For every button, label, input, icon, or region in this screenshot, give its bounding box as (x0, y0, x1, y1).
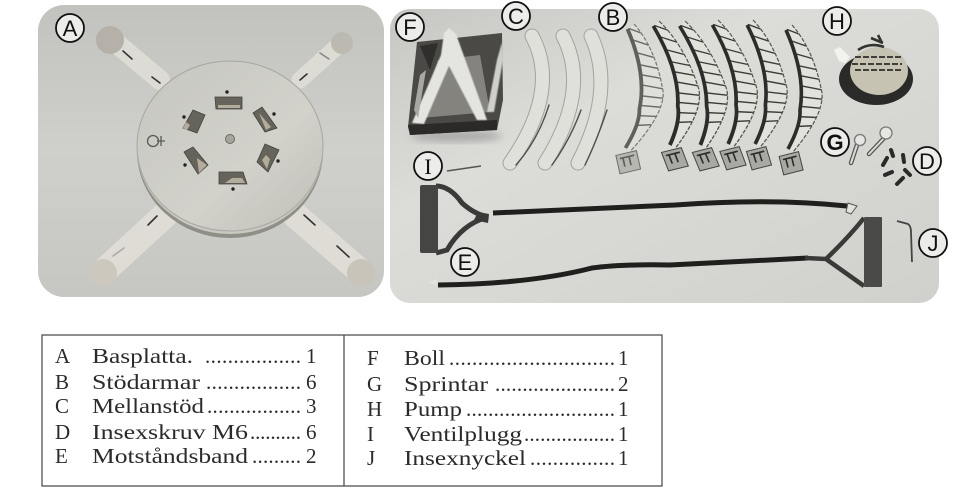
label C: C (508, 4, 524, 29)
row A: ................. (205, 344, 301, 368)
label I (414, 152, 442, 180)
row H: Pump (404, 397, 462, 421)
support arm 5 (740, 20, 797, 170)
row E: E (55, 444, 68, 468)
row H: 1 (618, 397, 628, 421)
row I: I (367, 422, 374, 446)
row E: Motståndsband (92, 444, 249, 468)
part H: pump (834, 35, 913, 105)
row C: 3 (306, 394, 316, 418)
panel A: base plate photo (38, 5, 384, 297)
row C: ................. (207, 394, 301, 418)
row B (55, 370, 316, 394)
label J (919, 229, 947, 257)
row F: Boll (404, 346, 445, 370)
row A: Basplatta. (92, 344, 193, 368)
row D (55, 420, 316, 444)
label F (396, 13, 424, 41)
row J (367, 446, 628, 470)
label D: D (919, 149, 935, 174)
row J: J (367, 446, 375, 470)
row I: 1 (618, 422, 628, 446)
row G (367, 372, 628, 396)
label J: J (928, 231, 938, 256)
row B: 6 (306, 370, 316, 394)
disc slots (183, 97, 279, 184)
row C: Mellanstöd (92, 394, 205, 418)
support arm 2 (645, 21, 715, 171)
label H: H (829, 9, 845, 34)
row J: 1 (618, 446, 628, 470)
label E: E (458, 250, 472, 275)
support arm 3 (672, 21, 746, 171)
row I: ................. (524, 422, 615, 446)
support arm 1 (615, 24, 672, 174)
row E (55, 444, 316, 468)
base plate disc (137, 61, 323, 238)
label G: G (826, 130, 844, 155)
part D: hex screws (883, 150, 910, 184)
row E: ......... (252, 444, 301, 468)
part G: pins (851, 127, 892, 163)
support arm 4 (705, 20, 772, 170)
row G: 2 (618, 372, 628, 396)
label B (599, 3, 627, 31)
row D: .......... (250, 420, 301, 444)
label C (502, 2, 530, 30)
row F: F (367, 346, 379, 370)
part E: resistance band 1 (420, 185, 857, 253)
row C (55, 394, 316, 418)
row J: Insexnyckel (404, 446, 526, 470)
row F: 1 (618, 346, 628, 370)
base plate arms (89, 26, 375, 287)
part I: valve plug (447, 166, 481, 171)
row J: ............... (530, 446, 615, 470)
row G: G (367, 372, 382, 396)
row D: D (55, 420, 70, 444)
row A: 1 (306, 344, 316, 368)
label G (821, 128, 849, 156)
part E: resistance band 2 (428, 217, 882, 287)
row B: ................. (206, 370, 301, 394)
part C: intermediate supports (510, 36, 607, 165)
part B: support arms (615, 20, 828, 175)
row A (55, 344, 316, 368)
row D: 6 (306, 420, 316, 444)
label F: F (403, 15, 417, 40)
row H: H (367, 397, 382, 421)
label I: I (424, 154, 432, 179)
label A (56, 14, 84, 42)
row I (367, 422, 628, 446)
row H: ........................... (466, 397, 615, 421)
row G: ...................... (495, 372, 615, 396)
row B: Stödarmar (92, 370, 200, 394)
part F: ball (408, 28, 503, 142)
label A: A (63, 16, 78, 41)
row F (367, 346, 628, 370)
label E (451, 248, 479, 276)
row A: A (55, 344, 71, 368)
row I: Ventilplugg (404, 422, 523, 446)
row H (367, 397, 628, 421)
row B: B (55, 370, 69, 394)
row E: 2 (306, 444, 316, 468)
label D (913, 147, 941, 175)
row C: C (55, 394, 69, 418)
row F: ............................. (449, 346, 615, 370)
label B: B (606, 5, 620, 30)
part J: hex key (897, 221, 912, 262)
row G: Sprintar (404, 372, 488, 396)
parts list table (42, 335, 662, 486)
panel parts photo (390, 2, 947, 303)
row D: Insexskruv M6 (92, 420, 248, 444)
label H (823, 7, 851, 35)
support arm 6 (779, 25, 828, 175)
